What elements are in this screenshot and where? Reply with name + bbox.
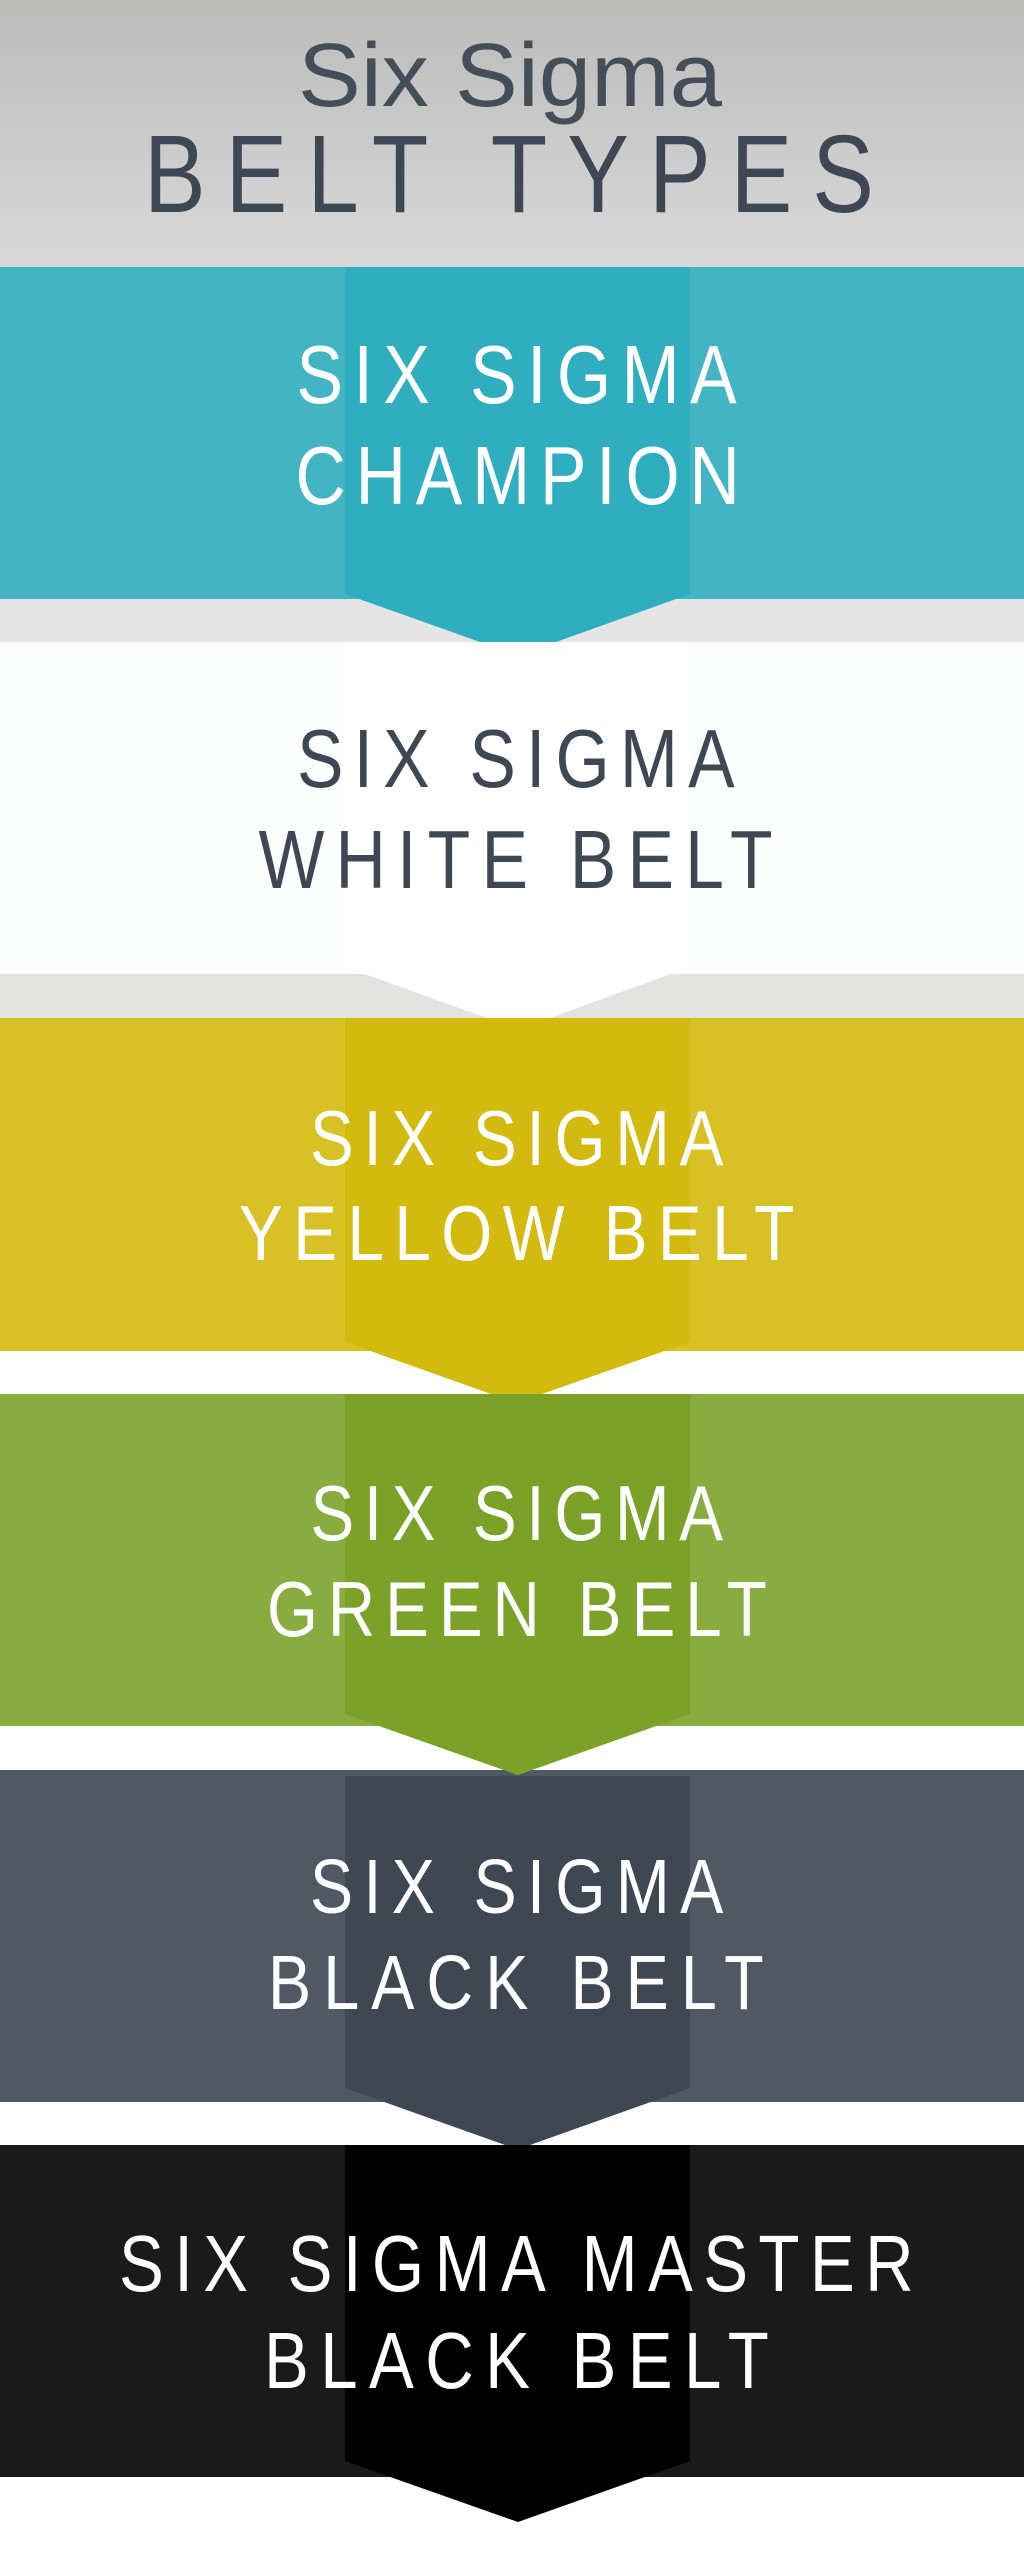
text: Six Sigma Master Black Belt: BLACK BELT (264, 2315, 769, 2405)
text: Six Sigma Green Belt: GREEN BELT (267, 1567, 767, 1653)
text: Six Sigma White Belt: WHITE BELT (258, 814, 773, 906)
arrow: master black belt chevron (345, 2145, 690, 2522)
text: Six Sigma Yellow Belt (239, 1096, 794, 1277)
text: Six Sigma Black Belt: SIX SIGMA (310, 1845, 724, 1930)
text: Six Sigma Master Black Belt: SIX SIGMA MASTER (119, 2218, 914, 2308)
panel: header (0, 0, 1024, 267)
text: Six Sigma Black Belt: BLACK BELT (268, 1941, 764, 2026)
text: Six Sigma White Belt: SIX SIGMA (297, 713, 735, 805)
text: Six Sigma Champion: SIX SIGMA (296, 329, 737, 421)
heading: Six Sigma: Six Sigma (298, 26, 723, 126)
panel: black belt (0, 1770, 1024, 2145)
text: Six Sigma Champion (296, 329, 740, 522)
text: Six Sigma Master Black Belt (119, 2218, 914, 2405)
arrow: black belt chevron (345, 1776, 690, 2145)
text: Six Sigma Green Belt (267, 1471, 767, 1653)
panel: green belt (0, 1394, 1024, 1775)
panel: white belt (0, 642, 1024, 1018)
arrow: champion chevron (345, 267, 690, 642)
text: Six Sigma White Belt (258, 713, 773, 906)
heading: Belt Types: BELT TYPES (144, 112, 874, 236)
text: Six Sigma Green Belt: SIX SIGMA (310, 1471, 723, 1557)
panel: master black belt (0, 2145, 1024, 2522)
text: Six Sigma Champion: CHAMPION (296, 430, 740, 522)
arrow: yellow belt chevron (345, 1018, 690, 1394)
panel: yellow belt (0, 1018, 1024, 1394)
text: Six Sigma Yellow Belt: YELLOW BELT (239, 1191, 794, 1277)
panel: champion (0, 267, 1024, 642)
text: Six Sigma Yellow Belt: SIX SIGMA (310, 1096, 723, 1182)
arrow: white belt chevron (345, 642, 690, 1018)
gap strip under champion panel (0, 599, 1024, 642)
text: Six Sigma Black Belt (268, 1845, 764, 2026)
arrow: green belt chevron (345, 1394, 690, 1775)
gap strip under white belt panel (0, 974, 1024, 1018)
